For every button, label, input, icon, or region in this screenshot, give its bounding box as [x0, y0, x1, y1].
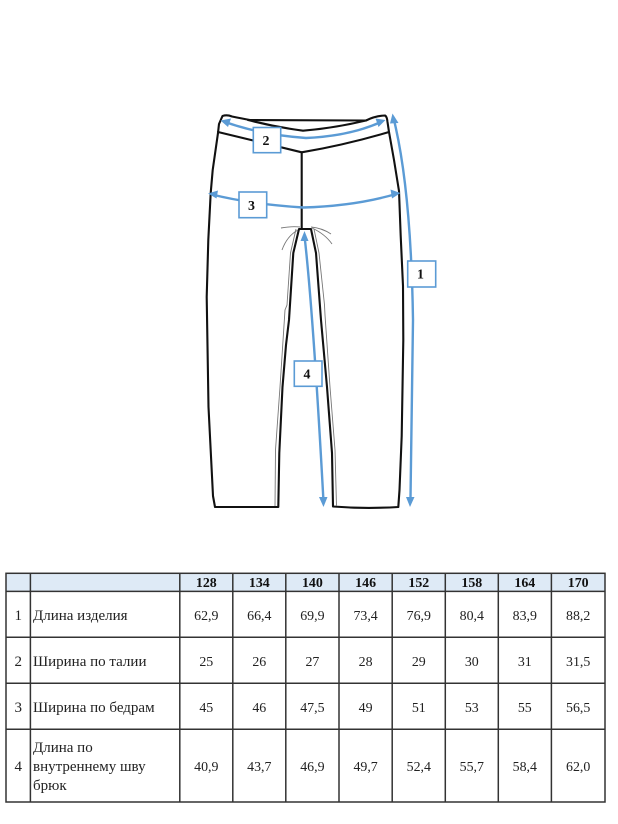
- row 4: inseam length: 58,4: [513, 760, 537, 775]
- table header background: [6, 573, 605, 592]
- row 3: hip width: 3: [15, 700, 22, 716]
- row 2: waist width: 30: [465, 655, 479, 670]
- row 1: product length: 1: [15, 608, 22, 624]
- row 2: waist width: 28: [359, 655, 373, 670]
- row 2: waist width: [15, 654, 590, 670]
- header row: sizes: 134: [249, 576, 270, 591]
- header row: sizes: 152: [408, 576, 429, 591]
- row 4: inseam length: 43,7: [247, 760, 272, 775]
- label box 2: 2: [263, 134, 270, 149]
- row 1: product length: 62,9: [194, 609, 219, 624]
- row 1: product length: 88,2: [566, 609, 590, 624]
- label box 2: [253, 128, 281, 153]
- row 4: inseam length: 49,7: [353, 760, 378, 775]
- row 2: waist width: 31,5: [566, 655, 590, 670]
- pants diagram: [207, 114, 436, 508]
- row 3: hip width: 53: [465, 701, 479, 716]
- arrow 2: waist width: [220, 118, 386, 138]
- row 3: hip width: 49: [359, 701, 373, 716]
- row 3: hip width: 46: [252, 701, 266, 716]
- arrow 4: inseam length: [300, 231, 328, 507]
- label box 1: 1: [417, 268, 424, 282]
- header row: sizes: 140: [302, 576, 323, 591]
- row 1: product length: 66,4: [247, 609, 272, 624]
- header row: sizes: 128: [196, 576, 217, 591]
- header row: sizes: 170: [568, 576, 589, 591]
- row 2: waist width: 25: [199, 655, 213, 670]
- row 4: inseam length: внутреннему шву: [33, 759, 146, 775]
- label box 4: 4: [304, 368, 311, 382]
- row 4: inseam length: 62,0: [566, 760, 590, 775]
- label box 4: [294, 361, 322, 386]
- row 4: inseam length: 40,9: [194, 760, 219, 775]
- row 3: hip width: Ширина по бедрам: [33, 700, 155, 716]
- row 2: waist width: 2: [15, 654, 22, 670]
- row 3: hip width: 56,5: [566, 701, 590, 716]
- arrow 1: total length: [390, 114, 414, 507]
- header row: sizes: 146: [355, 576, 376, 591]
- label box 1: [408, 261, 436, 287]
- row 3: hip width: 55: [518, 701, 532, 716]
- inseam stitching and wrinkles: [275, 227, 336, 506]
- arrow 3: hip width: [208, 190, 400, 208]
- row 4: inseam length: 55,7: [460, 760, 484, 775]
- row 1: product length: 83,9: [513, 609, 537, 624]
- row 3: hip width: 47,5: [300, 701, 325, 716]
- header row: sizes: [196, 576, 589, 591]
- row 2: waist width: 29: [412, 655, 426, 670]
- row 3: hip width: [15, 700, 590, 716]
- header row: sizes: 158: [461, 576, 482, 591]
- row 2: waist width: 31: [518, 655, 532, 670]
- row 4: inseam length: Длина по: [33, 740, 93, 756]
- row 4: inseam length: 4: [15, 759, 23, 775]
- row 3: hip width: 45: [199, 701, 213, 716]
- row 2: waist width: Ширина по талии: [33, 654, 146, 670]
- row 4: inseam length: 46,9: [300, 760, 325, 775]
- pants outline: [207, 115, 403, 508]
- label box 3: [239, 192, 267, 218]
- header row: sizes: 164: [514, 576, 535, 591]
- label box 3: 3: [248, 199, 255, 214]
- row 3: hip width: 51: [412, 701, 426, 716]
- row 4: inseam length: брюк: [33, 778, 67, 794]
- row 4: inseam length: [15, 740, 590, 794]
- row 1: product length: 69,9: [300, 609, 325, 624]
- row 2: waist width: 26: [252, 655, 266, 670]
- size table: [6, 573, 605, 802]
- row 1: product length: 76,9: [407, 609, 431, 624]
- row 2: waist width: 27: [305, 655, 319, 670]
- row 1: product length: 80,4: [460, 609, 484, 624]
- table grid: [6, 573, 605, 802]
- row 1: product length: 73,4: [353, 609, 378, 624]
- row 4: inseam length: 52,4: [407, 760, 431, 775]
- row 1: product length: Длина изделия: [33, 608, 128, 624]
- row 1: product length: [15, 608, 590, 624]
